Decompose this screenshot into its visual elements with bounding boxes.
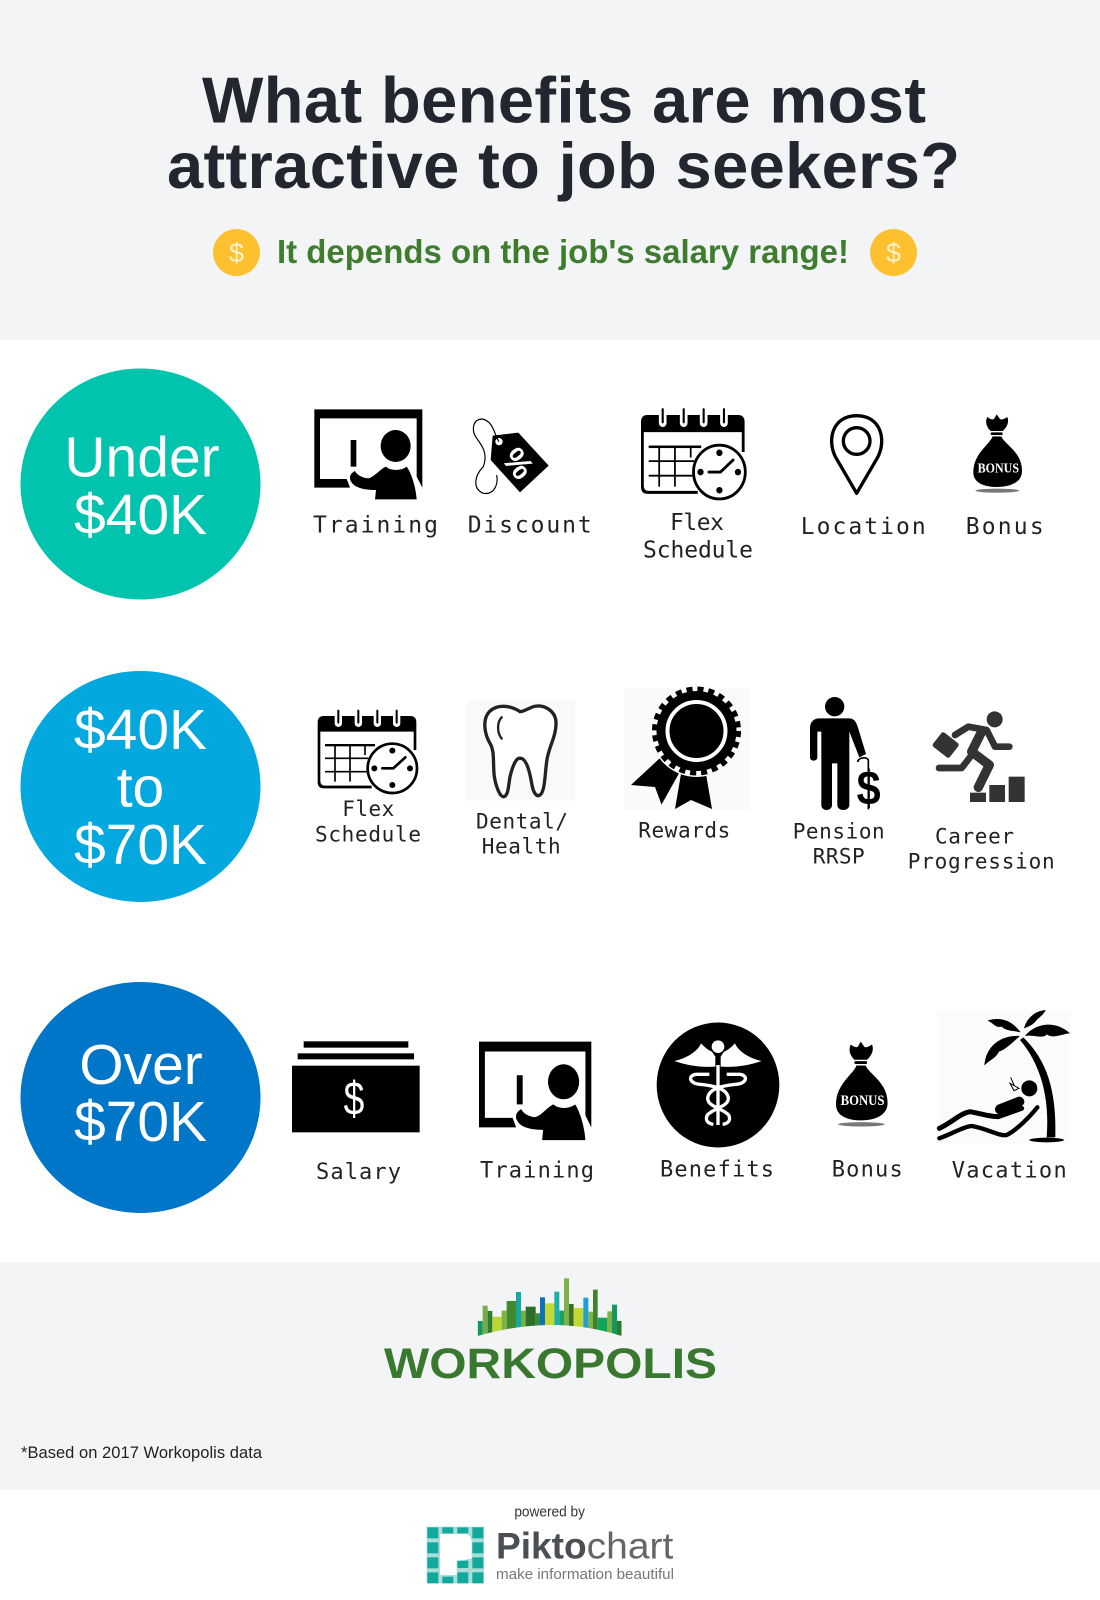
icon: tooth [466, 701, 575, 801]
benefit: vacation [937, 1010, 1071, 1183]
icon: discount tag: % [495, 440, 542, 486]
benefit: benefits [657, 1022, 779, 1183]
benefit: discount: Discount [468, 513, 592, 539]
wordmark: Piktochart: Pikto [496, 1525, 587, 1566]
salary circle: over 70K: Over [79, 1033, 203, 1097]
benefit: rewards: Rewards [638, 818, 730, 842]
benefit: flex schedule: Schedule [643, 537, 753, 563]
icon: stack of cash [292, 1041, 420, 1132]
benefit: vacation: Vacation [952, 1158, 1067, 1183]
icon: left coin [213, 229, 260, 276]
benefit: flex schedule [641, 409, 753, 563]
benefit: flex schedule: Flex [342, 797, 394, 821]
icon: person with dollar [810, 697, 881, 815]
icon: money bag [836, 1042, 888, 1127]
salary circle: under 40K [20, 368, 260, 600]
benefit: location: Location [801, 514, 926, 540]
icon: right coin: $ [886, 238, 901, 268]
benefit: training: Training [313, 513, 438, 539]
icon: rosette [624, 685, 750, 810]
salary circle: under 40K: Under [64, 426, 220, 490]
icon: calendar clock [641, 409, 745, 499]
icon: money bag: BONUS [841, 1093, 884, 1109]
logo skyline [478, 1278, 622, 1341]
icon: money bag: BONUS [978, 462, 1019, 477]
benefit: bonus [832, 1042, 903, 1183]
icon: right coin [870, 229, 917, 276]
benefit: pension RRSP: Pension [793, 819, 885, 843]
logo: Workopolis [384, 1278, 717, 1388]
powered by: powered by [514, 1505, 586, 1521]
salary circle: over 70K: $70K [74, 1090, 207, 1154]
icon: caduceus [657, 1022, 779, 1147]
subtitle text: It depends on the job's salary range! [277, 233, 849, 270]
benefit: dental health: Dental/ [476, 809, 568, 833]
salary circle: 40K to 70K: $70K [74, 813, 207, 877]
tagline: make information beautiful [496, 1567, 674, 1583]
benefit: location [801, 416, 926, 540]
icon: calendar clock [318, 711, 417, 793]
footnote: *Based on 2017 Workopolis data [21, 1444, 263, 1462]
icon: map pin [832, 416, 882, 493]
benefit: flex schedule: Schedule [315, 823, 421, 847]
icon: Piktochart grid logo [427, 1527, 484, 1583]
icon: left coin: $ [229, 238, 244, 268]
panel: 40K to 70K row [20, 671, 1055, 902]
benefit: pension RRSP [793, 697, 885, 868]
benefit: training [313, 409, 438, 539]
panel: header [0, 0, 1100, 340]
benefit: flex schedule: Flex [670, 510, 724, 536]
title: What benefits are most [202, 64, 926, 136]
benefit: salary [292, 1041, 420, 1185]
title [167, 64, 960, 202]
benefit: career progression: Career [935, 824, 1014, 848]
salary circle: 40K to 70K: $40K [74, 698, 207, 762]
salary circle: 40K to 70K [20, 671, 260, 902]
salary circle: over 70K [20, 982, 260, 1213]
wordmark: Piktochart [496, 1525, 673, 1566]
icon: training [479, 1042, 591, 1140]
benefit: training: Training [480, 1158, 594, 1183]
salary circle: 40K to 70K: to [117, 756, 164, 820]
benefit: training [479, 1042, 594, 1183]
icon: training [314, 409, 422, 499]
benefit: benefits: Benefits [660, 1158, 774, 1183]
benefit: bonus: Bonus [832, 1158, 903, 1183]
benefit: dental health [466, 701, 575, 858]
benefit: salary: Salary [316, 1160, 401, 1185]
benefit: career progression: Progression [908, 849, 1055, 873]
benefit: bonus: Bonus [966, 514, 1044, 540]
icon: runner on rising bars [932, 711, 1025, 802]
logo wordmark: WORKOPOLIS [384, 1340, 717, 1388]
panel: over 70K row [20, 982, 1071, 1213]
benefit: bonus [966, 414, 1044, 540]
benefit: discount [468, 419, 592, 539]
benefit: pension RRSP: RRSP [813, 844, 865, 868]
wordmark: Piktochart: chart [587, 1525, 673, 1566]
salary circle: under 40K: $40K [74, 483, 207, 547]
benefit: career progression [908, 711, 1055, 873]
title: attractive to job seekers? [167, 129, 960, 202]
panel: Piktochart credit [427, 1505, 674, 1583]
panel: footer [0, 1262, 1100, 1490]
icon: person with dollar: $ [857, 761, 881, 815]
panel: under 40K row [20, 368, 1044, 600]
benefit: rewards [624, 685, 750, 842]
benefit: dental health: Health [482, 834, 561, 858]
benefit: flex schedule [315, 711, 421, 847]
subtitle with coin icons [213, 229, 917, 276]
icon: stack of cash: $ [344, 1072, 364, 1125]
icon: palm tree and lounger [937, 1010, 1071, 1143]
